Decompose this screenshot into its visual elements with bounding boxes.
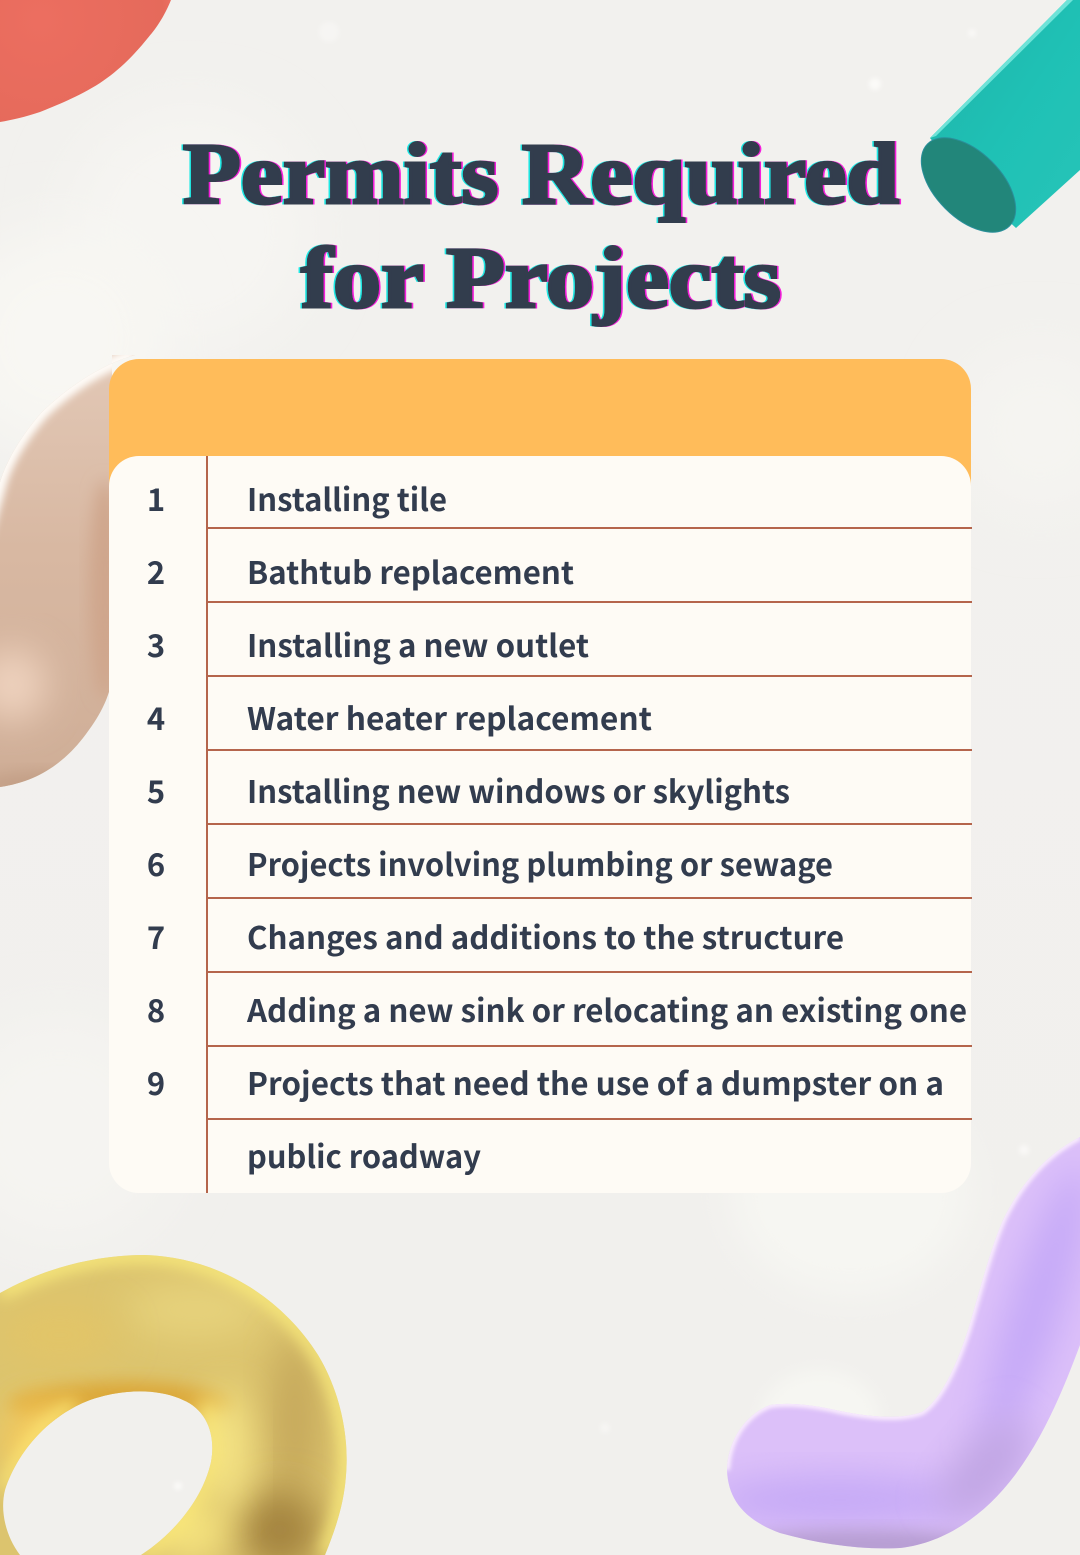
title: Permits Required: [183, 125, 899, 222]
table header band: [109, 359, 971, 490]
row labels: Installing tile: [247, 475, 447, 520]
row labels: Changes and additions to the structure: [247, 913, 844, 958]
row numbers: 4: [147, 694, 165, 739]
row labels: Projects involving plumbing or sewage: [247, 840, 833, 885]
shape: yellow torus bottom left: [0, 1240, 360, 1555]
row numbers: 2: [147, 548, 165, 593]
row labels: Installing new windows or skylights: [247, 767, 790, 812]
title: for Projects: [301, 229, 781, 326]
row numbers: 8: [147, 986, 165, 1031]
shape: purple tube bottom right: [710, 1137, 1080, 1555]
row numbers: 6: [147, 840, 165, 885]
row numbers: 7: [147, 913, 165, 958]
shape: teal cylinder top right: [904, 0, 1080, 249]
table body: [109, 456, 971, 1193]
table grid lines: [206, 456, 972, 1193]
row numbers: 1: [147, 475, 165, 520]
title: [183, 125, 899, 326]
table panel: [109, 359, 972, 1193]
shape: red blob top left: [0, 0, 171, 122]
row labels: public roadway: [247, 1132, 481, 1177]
row labels: [246, 475, 967, 1177]
row numbers: 5: [147, 767, 165, 812]
row labels: Installing a new outlet: [247, 621, 589, 666]
shape: beige tube left: [0, 355, 135, 799]
row numbers: 3: [147, 621, 165, 666]
row labels: Adding a new sink or relocating an existing one: [246, 986, 967, 1031]
row numbers: [147, 475, 165, 1104]
row numbers: 9: [147, 1059, 165, 1104]
row labels: Water heater replacement: [247, 694, 652, 739]
row labels: Projects that need the use of a dumpster on a: [247, 1059, 944, 1104]
row labels: Bathtub replacement: [247, 548, 574, 593]
